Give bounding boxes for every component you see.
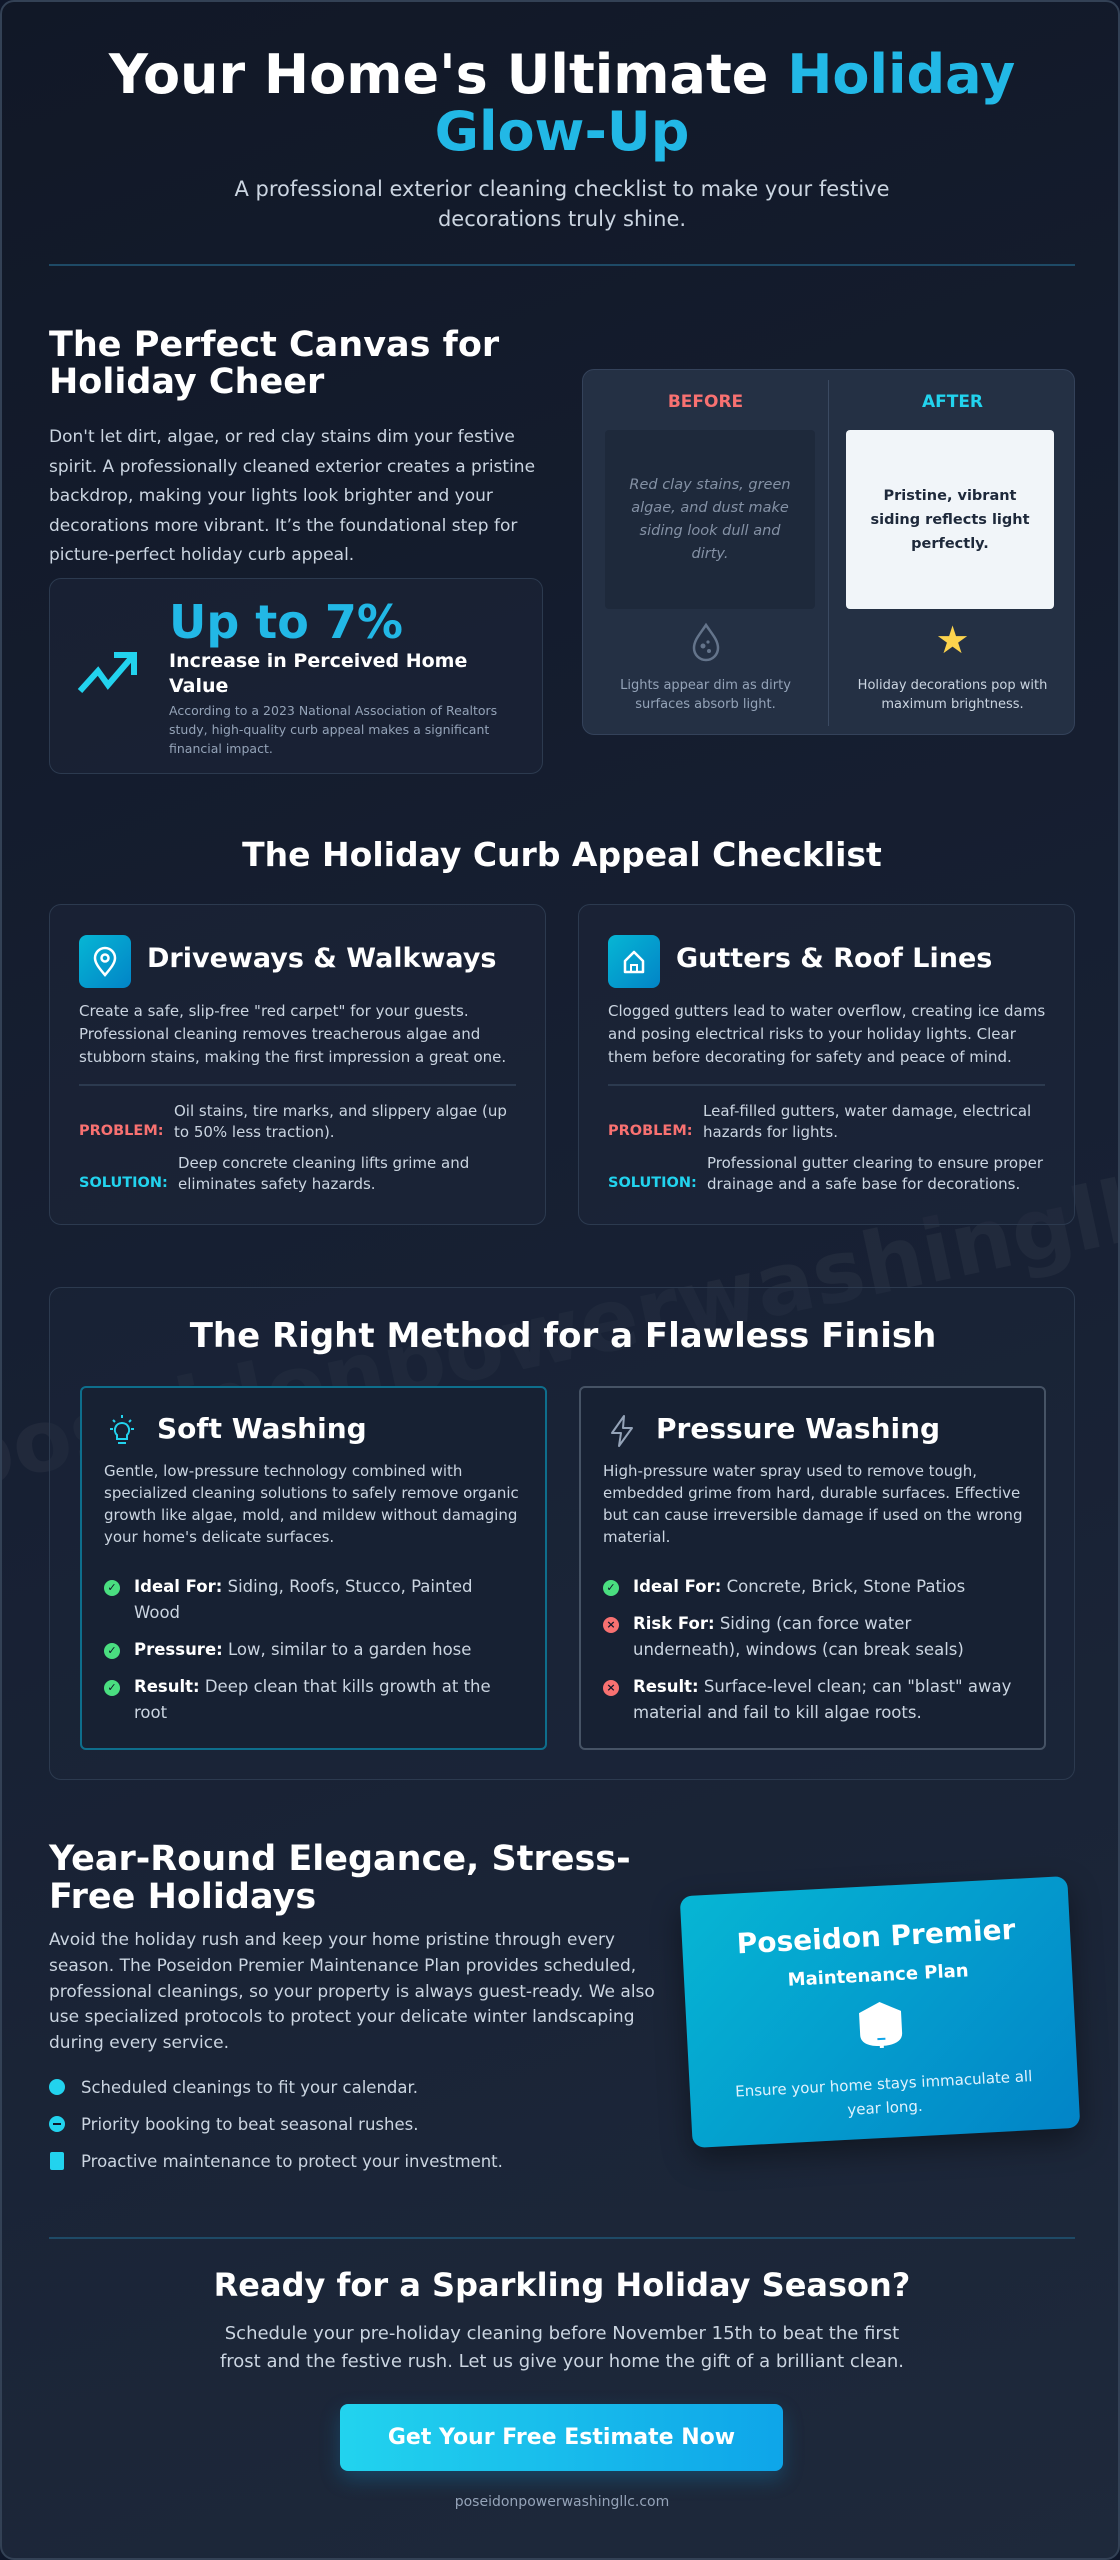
card: driveways: Driveways & Walkways — [147, 943, 496, 974]
footer url: poseidonpowerwashingllc.com — [455, 2494, 669, 2510]
card: pressure washing: Pressure Washing — [656, 1412, 940, 1445]
icon: trending up — [78, 652, 137, 693]
list: soft washing: ✓ — [107, 1644, 117, 1657]
benefits list — [49, 2078, 503, 2171]
list: soft washing: Result: Deep clean that kills growth at the root — [134, 1677, 491, 1722]
checklist heading: The Holiday Curb Appeal Checklist — [242, 835, 882, 874]
list: pressure washing: × — [606, 1681, 616, 1694]
benefits list: Scheduled cleanings to fit your calendar. — [81, 2078, 418, 2097]
benefits list: Priority booking to beat seasonal rushes. — [81, 2115, 418, 2134]
stat text: Increase in Perceived Home Value — [169, 650, 467, 697]
card: gutters: Gutters & Roof Lines — [676, 943, 992, 974]
icon: location — [79, 935, 131, 988]
icon: bulb — [110, 1415, 134, 1444]
CTA text: Schedule your pre-holiday cleaning before November 15th to beat the first frost and the festive rush. Let us give your home the gift of a brilliant clean. — [220, 2323, 904, 2372]
card: premier plan: Maintenance Plan — [787, 1960, 969, 1991]
card: premier plan: Poseidon Premier — [736, 1913, 1016, 1960]
before column: BEFORE — [668, 392, 743, 412]
title — [108, 43, 1015, 163]
title: Your Home's Ultimate Holiday — [109, 43, 1015, 106]
card: premier plan — [680, 1876, 1080, 2148]
section: year-round text: Avoid the holiday rush and keep your home pristine through every season. The Poseidon Premier Maintenance Plan provides scheduled, professional cleanings, so your property is always guest-ready. We also use specialized protocols to protect your delicate winter landscaping during every service. — [49, 1930, 655, 2053]
list: pressure washing: Risk For: Siding (can force water underneath), windows (can break seals) — [633, 1614, 964, 1659]
card: driveways: Oil stains, tire marks, and slippery algae (up to 50% less traction). — [174, 1102, 507, 1141]
card: pressure washing: High-pressure water spray used to remove tough, embedded grime from hard, durable surfaces. Effective but can cause irreversible damage if used on the wrong material. — [603, 1462, 1022, 1546]
card: premier plan: Ensure your home stays immaculate all year long. — [735, 2067, 1033, 2119]
card: driveways: Deep concrete cleaning lifts grime and eliminates safety hazards. — [178, 1154, 469, 1193]
icon: lightning — [611, 1415, 633, 1447]
CTA button — [340, 2404, 783, 2471]
list: pressure washing: Result: Surface-level clean; can "blast" away material and fail to kill algae roots. — [633, 1677, 1011, 1722]
list: pressure washing: Ideal For: Concrete, Brick, Stone Patios — [633, 1577, 965, 1596]
list: pressure washing — [603, 1577, 1011, 1722]
card: gutters: Clogged gutters lead to water overflow, creating ice dams and posing electrical risks to your holiday lights. Clear them before decorating for safety and peace of mind. — [608, 1002, 1045, 1066]
card: driveways: PROBLEM: — [79, 1123, 164, 1139]
benefits list: Proactive maintenance to protect your investment. — [81, 2152, 503, 2171]
card: gutters: Leaf-filled gutters, water damage, electrical hazards for lights. — [703, 1102, 1031, 1141]
list: soft washing: Pressure: Low, similar to a garden hose — [134, 1640, 471, 1659]
icon: dirt drop — [692, 623, 720, 662]
list: soft washing: Ideal For: Siding, Roofs, Stucco, Painted Wood — [134, 1577, 473, 1622]
methods heading: The Right Method for a Flawless Finish — [190, 1316, 936, 1356]
stat text — [169, 595, 497, 756]
list: soft washing: ✓ — [107, 1581, 117, 1594]
card: gutters: Professional gutter clearing to ensure proper drainage and a safe base for decorations. — [707, 1154, 1043, 1193]
card: pressure washing — [579, 1386, 1046, 1750]
stat text: Up to 7% — [169, 595, 403, 649]
icon: star: ★ — [935, 618, 970, 662]
section: year-round text: Year-Round Elegance, Stress-Free Holidays — [49, 1839, 631, 1917]
section: perfect canvas text: The Perfect Canvas for Holiday Cheer — [49, 325, 499, 402]
before/after panel: Red clay stains, green algae, and dust make siding look dull and dirty. — [629, 476, 791, 562]
stat box — [49, 578, 543, 774]
list: pressure washing: × — [606, 1618, 616, 1631]
card: driveways: SOLUTION: — [79, 1175, 168, 1191]
list: pressure washing: ✓ — [606, 1581, 616, 1594]
subtitle: A professional exterior cleaning checklist to make your festive decorations truly shine. — [234, 177, 890, 231]
card: driveways: Create a safe, slip-free "red carpet" for your guests. Professional cleaning removes treacherous algae and stubborn stains, making the first impression a great one. — [79, 1002, 506, 1066]
section: perfect canvas text — [49, 325, 535, 565]
CTA heading: Ready for a Sparkling Holiday Season? — [214, 2266, 910, 2304]
card: gutters: PROBLEM: — [608, 1123, 693, 1139]
before/after panel: Pristine, vibrant siding reflects light perfectly. — [870, 488, 1030, 552]
section: perfect canvas text: Don't let dirt, algae, or red clay stains dim your festive spirit. A professionally cleaned exterior creates a pristine backdrop, making your lights look brighter and your decorations more vibrant. It’s the foundational step for picture-perfect holiday curb appeal. — [49, 427, 535, 565]
before/after panel: Lights appear dim as dirty surfaces absorb light. — [620, 678, 791, 712]
CTA button: Get Your Free Estimate Now — [388, 2425, 735, 2450]
card: soft washing — [80, 1386, 547, 1750]
before/after panel: Holiday decorations pop with maximum brightness. — [858, 678, 1047, 712]
title: Glow-Up — [435, 100, 689, 163]
icon: shield — [859, 2002, 902, 2048]
stat text: According to a 2023 National Association of Realtors study, high-quality curb appeal makes a significant financial impact. — [169, 703, 497, 756]
card: gutters: SOLUTION: — [608, 1175, 697, 1191]
list: soft washing: ✓ — [107, 1681, 117, 1694]
list: soft washing — [104, 1577, 491, 1722]
section: year-round text — [48, 1839, 655, 2171]
card: soft washing: Soft Washing — [157, 1412, 367, 1445]
card: soft washing: Gentle, low-pressure technology combined with specialized cleaning solutions to safely remove organic growth like algae, mold, and mildew without damaging your home's delicate surfaces. — [104, 1462, 519, 1546]
card: driveways — [49, 904, 546, 1225]
after column: AFTER — [922, 392, 983, 412]
icon: house — [608, 935, 660, 988]
panel: methods — [49, 1287, 1075, 1780]
card: gutters — [578, 904, 1075, 1225]
before/after panel — [582, 369, 1075, 735]
